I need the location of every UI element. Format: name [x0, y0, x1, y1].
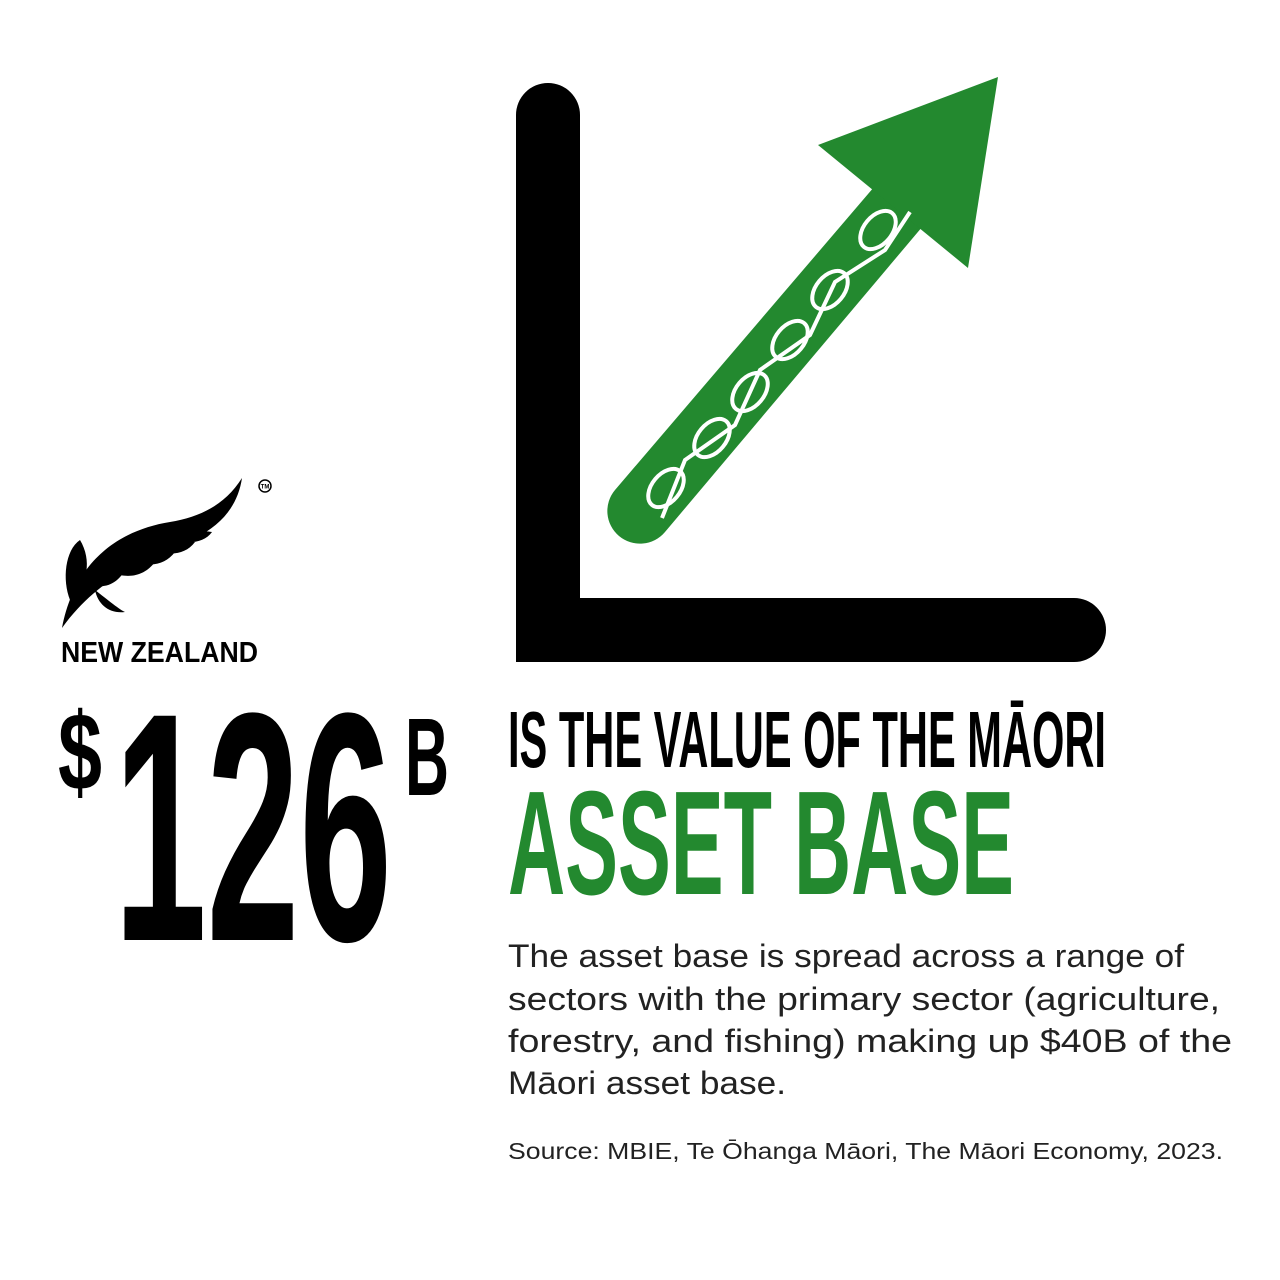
body text: sectors with the primary sector (agriculture, — [508, 981, 1220, 1017]
body text: forestry, and fishing) making up $40B of the — [508, 1023, 1232, 1059]
big figure: $126B: 126 — [114, 646, 392, 1010]
growth arrow — [607, 77, 998, 544]
logo wordmark: NEW ZEALAND — [61, 637, 258, 669]
arrow koru pattern — [641, 204, 910, 518]
logo trademark: TM — [261, 484, 269, 490]
body text: The asset base is spread across a range of — [508, 938, 1184, 974]
body text: Māori asset base. — [508, 1065, 786, 1101]
big figure: $126B: $ — [58, 691, 102, 814]
logo trademark — [259, 480, 271, 492]
chart axes: L shape — [516, 83, 1106, 662]
source note: Source: MBIE, Te Ōhanga Māori, The Māori Economy, 2023. — [508, 1138, 1223, 1164]
body text — [508, 938, 1232, 1101]
logo: silver fern — [62, 478, 242, 628]
big figure: $126B: B — [405, 696, 449, 819]
big figure: $126B — [58, 646, 449, 1010]
